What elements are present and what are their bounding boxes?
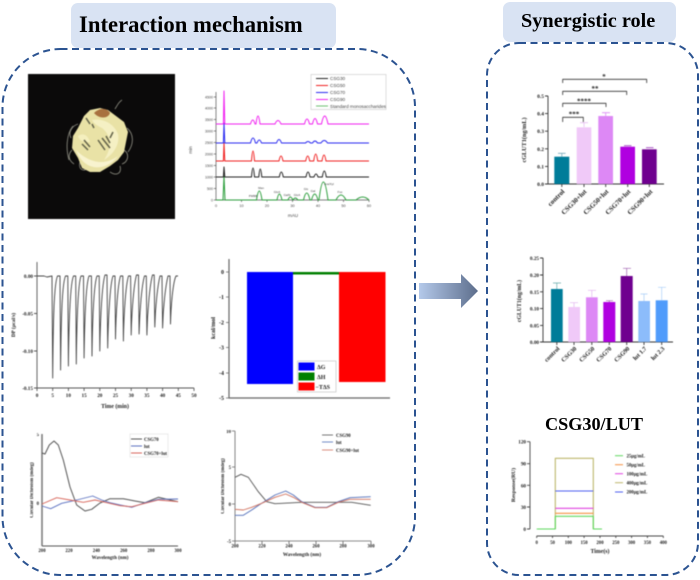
bar: lut 1.7 [638, 301, 650, 342]
CD left legend: CSG70 [144, 438, 159, 443]
top y tick labels: 0.3 [537, 129, 544, 135]
SPR legend: 400μg/mL [626, 482, 647, 486]
panel: interaction mechanism dashed frame [2, 49, 415, 575]
middle error bars [553, 283, 561, 289]
top error bar CSG30 [580, 123, 588, 127]
SPR x tick labels: 350 [644, 541, 652, 546]
chromatogram x tick labels [215, 204, 371, 208]
bar: CSG30 [568, 307, 580, 342]
energy y tick labels: -1 [219, 295, 224, 301]
chromatogram y tick labels [205, 96, 213, 202]
chart: circular dichroism CSG90 [221, 430, 375, 558]
middle error bars blue [640, 287, 666, 301]
bar: control [554, 157, 569, 184]
middle y title: cGLUT1(ng/mL) [516, 280, 523, 322]
ITC x tick labels: 20 [97, 393, 103, 399]
CD right y tick labels: -5 [227, 540, 232, 545]
CD right curve lut [235, 491, 371, 515]
chromatogram x tick labels: 40 [316, 204, 320, 208]
significance brackets [563, 79, 647, 122]
chromatogram x tick labels: 0 [215, 204, 217, 208]
heading: Interaction mechanism: Interaction mechanism [79, 12, 303, 37]
chromatogram y tick labels: 0 [211, 198, 213, 202]
bar: CSG90 [621, 276, 633, 342]
CD left x tick labels: 220 [65, 549, 73, 554]
SPR x tick labels [535, 541, 667, 546]
chart: HPLC chromatogram [188, 74, 387, 218]
middle y tick labels: 0.00 [530, 340, 539, 346]
heading: Synergistic role [503, 2, 676, 42]
CD right x title: Wavelength (nm) [283, 551, 321, 558]
SPR legend: 200μg/mL [626, 490, 647, 496]
ITC x tick labels: 0 [36, 393, 39, 399]
CD right y tick labels: 0 [229, 503, 232, 508]
CD left legend: lut [144, 445, 150, 450]
bar: delta H [293, 272, 339, 274]
arrow: from mechanism to role [419, 274, 478, 308]
panel: synergistic role dashed frame [487, 43, 698, 575]
CD right legend: CSG90+lut [336, 449, 359, 454]
energy y tick labels: 0 [221, 270, 224, 276]
chromatogram peak labels: Fuc [337, 190, 343, 194]
ITC x tick labels: 10 [66, 393, 71, 399]
middle error bars purple [606, 268, 631, 302]
SPR legend: 50μg/mL [626, 464, 645, 468]
chart: thermodynamic signature bars [211, 259, 390, 402]
middle x tick labels: control [543, 345, 562, 364]
middle bar axes [540, 258, 673, 345]
CD left legend: CSG70+lut [144, 452, 167, 457]
SPR x tick labels: 300 [628, 541, 636, 546]
CD right x tick labels: 240 [285, 544, 293, 550]
chromatogram peak labels: GlcA [274, 190, 280, 194]
chromatogram legend: CSG70 [330, 90, 346, 95]
chromatogram legend [311, 74, 387, 110]
CD right y tick labels: 10 [226, 430, 232, 435]
ITC x tick labels: 45 [176, 393, 181, 399]
ITC x tick labels [36, 393, 197, 399]
energy legend: ΔH [317, 375, 326, 381]
CD left x tick labels [38, 549, 182, 554]
bar: minus T delta S [339, 272, 386, 382]
top x tick labels [547, 188, 655, 216]
ITC x tick labels: 25 [113, 393, 118, 399]
CD right x tick labels: 300 [367, 544, 375, 550]
significance stars: **** [577, 98, 592, 106]
middle x tick labels: CSG70 [595, 345, 613, 364]
chromatogram legend: Standard monosaccharides [330, 104, 387, 109]
ITC y tick labels [22, 274, 33, 392]
heading: Interaction mechanism [71, 3, 336, 48]
chart: ITC thermogram [10, 262, 197, 410]
significance stars: ** [592, 85, 599, 93]
energy y axis title: kcal/mol [211, 317, 217, 339]
top y tick labels [537, 94, 544, 188]
trace: CSG50 [216, 143, 369, 161]
top y title: cGLUT1(ng/mL) [521, 117, 528, 163]
CD left y tick labels: 0 [37, 502, 40, 507]
chromatogram y tick labels: 2000 [205, 152, 213, 156]
trace: standard monosaccharides [216, 176, 369, 200]
SPR y tick labels: 30 [521, 505, 526, 511]
SPR x tick labels: 200 [596, 541, 604, 546]
top x tick labels: CSG70+lut [604, 188, 633, 216]
chromatogram legend: CSG90 [330, 97, 346, 102]
SPR x tick labels: 100 [565, 541, 572, 546]
chart title: CSG30/LUT: CSG30/LUT [545, 414, 643, 434]
top y tick labels: 0.2 [537, 147, 544, 153]
CD right x tick labels: 200 [231, 544, 239, 550]
ITC trace [37, 275, 178, 378]
chart: circular dichroism CSG70 [30, 433, 182, 561]
chromatogram y tick labels: 1000 [205, 176, 213, 180]
CD left legend [130, 434, 168, 457]
chromatogram peak labels: Gal [311, 189, 316, 193]
ITC x tick labels: 35 [144, 393, 150, 399]
chromatogram axes [214, 92, 369, 202]
top error bar CSG50 [602, 113, 610, 116]
energy y tick labels: -3 [219, 346, 224, 352]
SPR y tick labels: 90 [521, 462, 526, 468]
SPR x tick labels: 150 [580, 541, 588, 546]
chromatogram y tick labels: 500 [207, 187, 213, 191]
CD right x tick labels: 260 [312, 544, 320, 550]
chart: cGLUT1 with luteolin bars [521, 73, 664, 216]
chromatogram peak labels: GlcA [294, 193, 300, 197]
ITC y tick labels: 0.00 [24, 274, 33, 280]
trace: CSG30 [216, 167, 369, 177]
bar: CSG30+lut [577, 127, 591, 184]
SPR x tick labels: 250 [612, 541, 620, 546]
chromatogram legend: CSG50 [330, 83, 346, 88]
energy axes [229, 259, 390, 398]
middle y tick labels: 0.10 [530, 307, 539, 313]
significance stars: * [602, 73, 606, 81]
ITC y tick labels: -0.10 [22, 349, 33, 355]
energy axis ticks [226, 272, 229, 398]
bar: CSG50 [586, 297, 598, 342]
bar: CSG70+lut [620, 147, 635, 184]
CD left x title: Wavelength (nm) [92, 556, 129, 561]
CD left y tick labels: 5 [37, 433, 40, 438]
ITC axes [34, 262, 194, 391]
SPR axes [527, 442, 663, 538]
bar: CSG90+lut [642, 149, 657, 184]
chromatogram x tick labels: 20 [265, 204, 269, 208]
SPR y tick labels: 60 [521, 483, 526, 489]
chart: SPR sensorgram [510, 440, 667, 555]
CD left curve CSG70 [42, 441, 178, 511]
CD left x tick labels: 280 [147, 549, 155, 554]
CD left y tick labels [37, 433, 40, 507]
CD left y title: Circular Dichroism (mdeg) [30, 462, 35, 518]
SPR legend: 100μg/mL [626, 472, 647, 478]
chromatogram x tick labels: 30 [290, 204, 295, 208]
CD right y tick labels [226, 430, 232, 545]
chart: cGLUT1 single treatment bars [516, 256, 673, 364]
middle x tick labels [543, 345, 666, 364]
CD left x tick labels: 260 [120, 549, 128, 554]
SPR curve 400 ug/mL [555, 458, 593, 529]
SPR x tick labels: 0 [535, 541, 538, 546]
middle x tick labels: CSG50 [578, 345, 596, 364]
SPR x title: Time(s) [591, 548, 610, 555]
top x tick labels: control [547, 188, 566, 208]
SPR y tick labels [518, 440, 526, 533]
top y tick labels: 0.0 [537, 182, 544, 188]
bar: control [551, 289, 563, 342]
CD left x axis [42, 545, 178, 547]
chromatogram peak labels [249, 182, 343, 198]
CD right x tick labels: 280 [339, 544, 347, 550]
chromatogram x tick labels: 60 [367, 204, 371, 208]
ITC y axis title: DP (µcal/s) [10, 313, 17, 337]
CD right x tick labels: 220 [258, 544, 266, 550]
chromatogram y tick labels: 1500 [205, 164, 213, 168]
SPR curve 100 ug/mL [555, 507, 593, 509]
middle x tick labels: lut 2.3 [650, 345, 666, 362]
SPR legend: 25μg/mL [626, 454, 645, 460]
bar: CSG50+lut [598, 116, 613, 184]
middle y tick labels: 0.25 [530, 256, 539, 262]
CD right legend: lut [336, 441, 342, 446]
top error bars [558, 153, 566, 157]
CD right y title: Circular Dichroism (mdeg) [221, 458, 226, 514]
chromatogram y tick labels: 2500 [205, 141, 213, 145]
CD right x tick labels [231, 544, 375, 550]
SPR legend [615, 454, 647, 496]
energy legend: −TΔS [316, 385, 331, 391]
CD right legend [322, 434, 359, 454]
bar: lut 2.3 [656, 300, 668, 342]
ITC x axis title: Time (min) [101, 403, 129, 410]
photo: corn silk bundle [28, 74, 175, 219]
ITC y tick labels: -0.15 [22, 386, 33, 392]
CD left x tick labels: 200 [38, 549, 46, 554]
top x tick labels: CSG30+lut [560, 188, 589, 216]
chromatogram axis titles: mAU [288, 213, 298, 218]
energy legend [298, 361, 336, 392]
bar: delta G [247, 272, 293, 384]
CD left axes [41, 434, 43, 546]
energy y tick labels [219, 270, 224, 402]
CD right curve CSG90 [235, 474, 371, 505]
CD right legend: CSG90 [336, 434, 351, 439]
middle x tick labels: CSG30 [560, 345, 578, 364]
chromatogram peak labels: Ara/Xyl [324, 182, 334, 186]
significance stars [569, 73, 606, 118]
middle y tick labels: 0.05 [530, 323, 539, 329]
chromatogram y tick labels: 4500 [205, 96, 213, 100]
CD left curve CSG70+lut [42, 498, 178, 507]
energy legend: ΔG [317, 365, 326, 371]
bar: CSG70 [603, 302, 615, 342]
chromatogram peak labels: Man [258, 186, 264, 190]
chromatogram x tick labels: 50 [341, 204, 346, 208]
energy y tick labels: -4 [219, 371, 224, 377]
SPR x tick labels: 50 [550, 541, 556, 546]
ITC x tick labels: 50 [191, 393, 197, 399]
ITC x tick labels: 30 [129, 393, 134, 399]
middle x tick labels: lut 1.7 [632, 345, 648, 362]
CD right curve CSG90+lut [235, 494, 371, 510]
CD right axes [232, 431, 371, 544]
middle x tick labels: CSG90 [613, 345, 631, 364]
top x tick labels: CSG50+lut [582, 188, 611, 216]
ITC x tick labels: 40 [160, 393, 166, 399]
top bar axes [545, 96, 664, 187]
chromatogram legend: CSG30 [330, 76, 346, 81]
energy y tick labels: -2 [219, 320, 224, 326]
top x tick labels: CSG90+lut [626, 188, 655, 216]
significance stars: *** [569, 110, 580, 118]
trace: CSG90 [216, 91, 369, 124]
chromatogram peak labels: GalN [284, 193, 290, 197]
chromatogram y title: min [188, 146, 193, 154]
SPR y tick labels: 120 [518, 440, 526, 446]
SPR curve 25 ug/mL [537, 516, 602, 529]
heading: Synergistic role: Synergistic role [521, 10, 655, 32]
CD left x tick labels: 240 [93, 549, 100, 554]
chromatogram y tick labels: 3500 [205, 118, 213, 122]
SPR y tick labels: 0 [523, 527, 526, 533]
chromatogram x tick labels: 10 [239, 204, 244, 208]
middle y tick labels [530, 256, 539, 346]
SPR y title: Response(RU) [510, 468, 517, 502]
middle error bars pale [570, 290, 596, 307]
SPR x tick labels: 400 [660, 541, 667, 546]
top error bars CSG70 and CSG90 [624, 146, 654, 148]
chromatogram y tick labels: 3000 [205, 130, 213, 134]
middle y tick labels: 0.20 [530, 273, 539, 279]
chromatogram y tick labels: 4000 [205, 106, 213, 110]
chromatogram peak labels: PMBB [249, 194, 257, 198]
SPR curve 200 ug/mL [555, 490, 593, 492]
CD left curve lut [42, 496, 178, 509]
top y tick labels: 0.4 [537, 112, 544, 118]
CD right y tick labels: 5 [229, 466, 232, 471]
SPR curve 50 ug/mL [555, 512, 593, 514]
chromatogram peak labels: Glc [304, 187, 309, 191]
trace: CSG70 [216, 123, 369, 143]
ITC x tick labels: 5 [51, 393, 54, 399]
middle y tick labels: 0.15 [530, 290, 539, 296]
ITC x tick labels: 15 [82, 393, 87, 399]
top y tick labels: 0.1 [537, 164, 544, 170]
top y tick labels: 0.5 [537, 94, 544, 100]
CD left x tick labels: 300 [174, 549, 182, 554]
energy y tick labels: -5 [219, 396, 224, 402]
ITC y tick labels: -0.05 [22, 312, 33, 318]
